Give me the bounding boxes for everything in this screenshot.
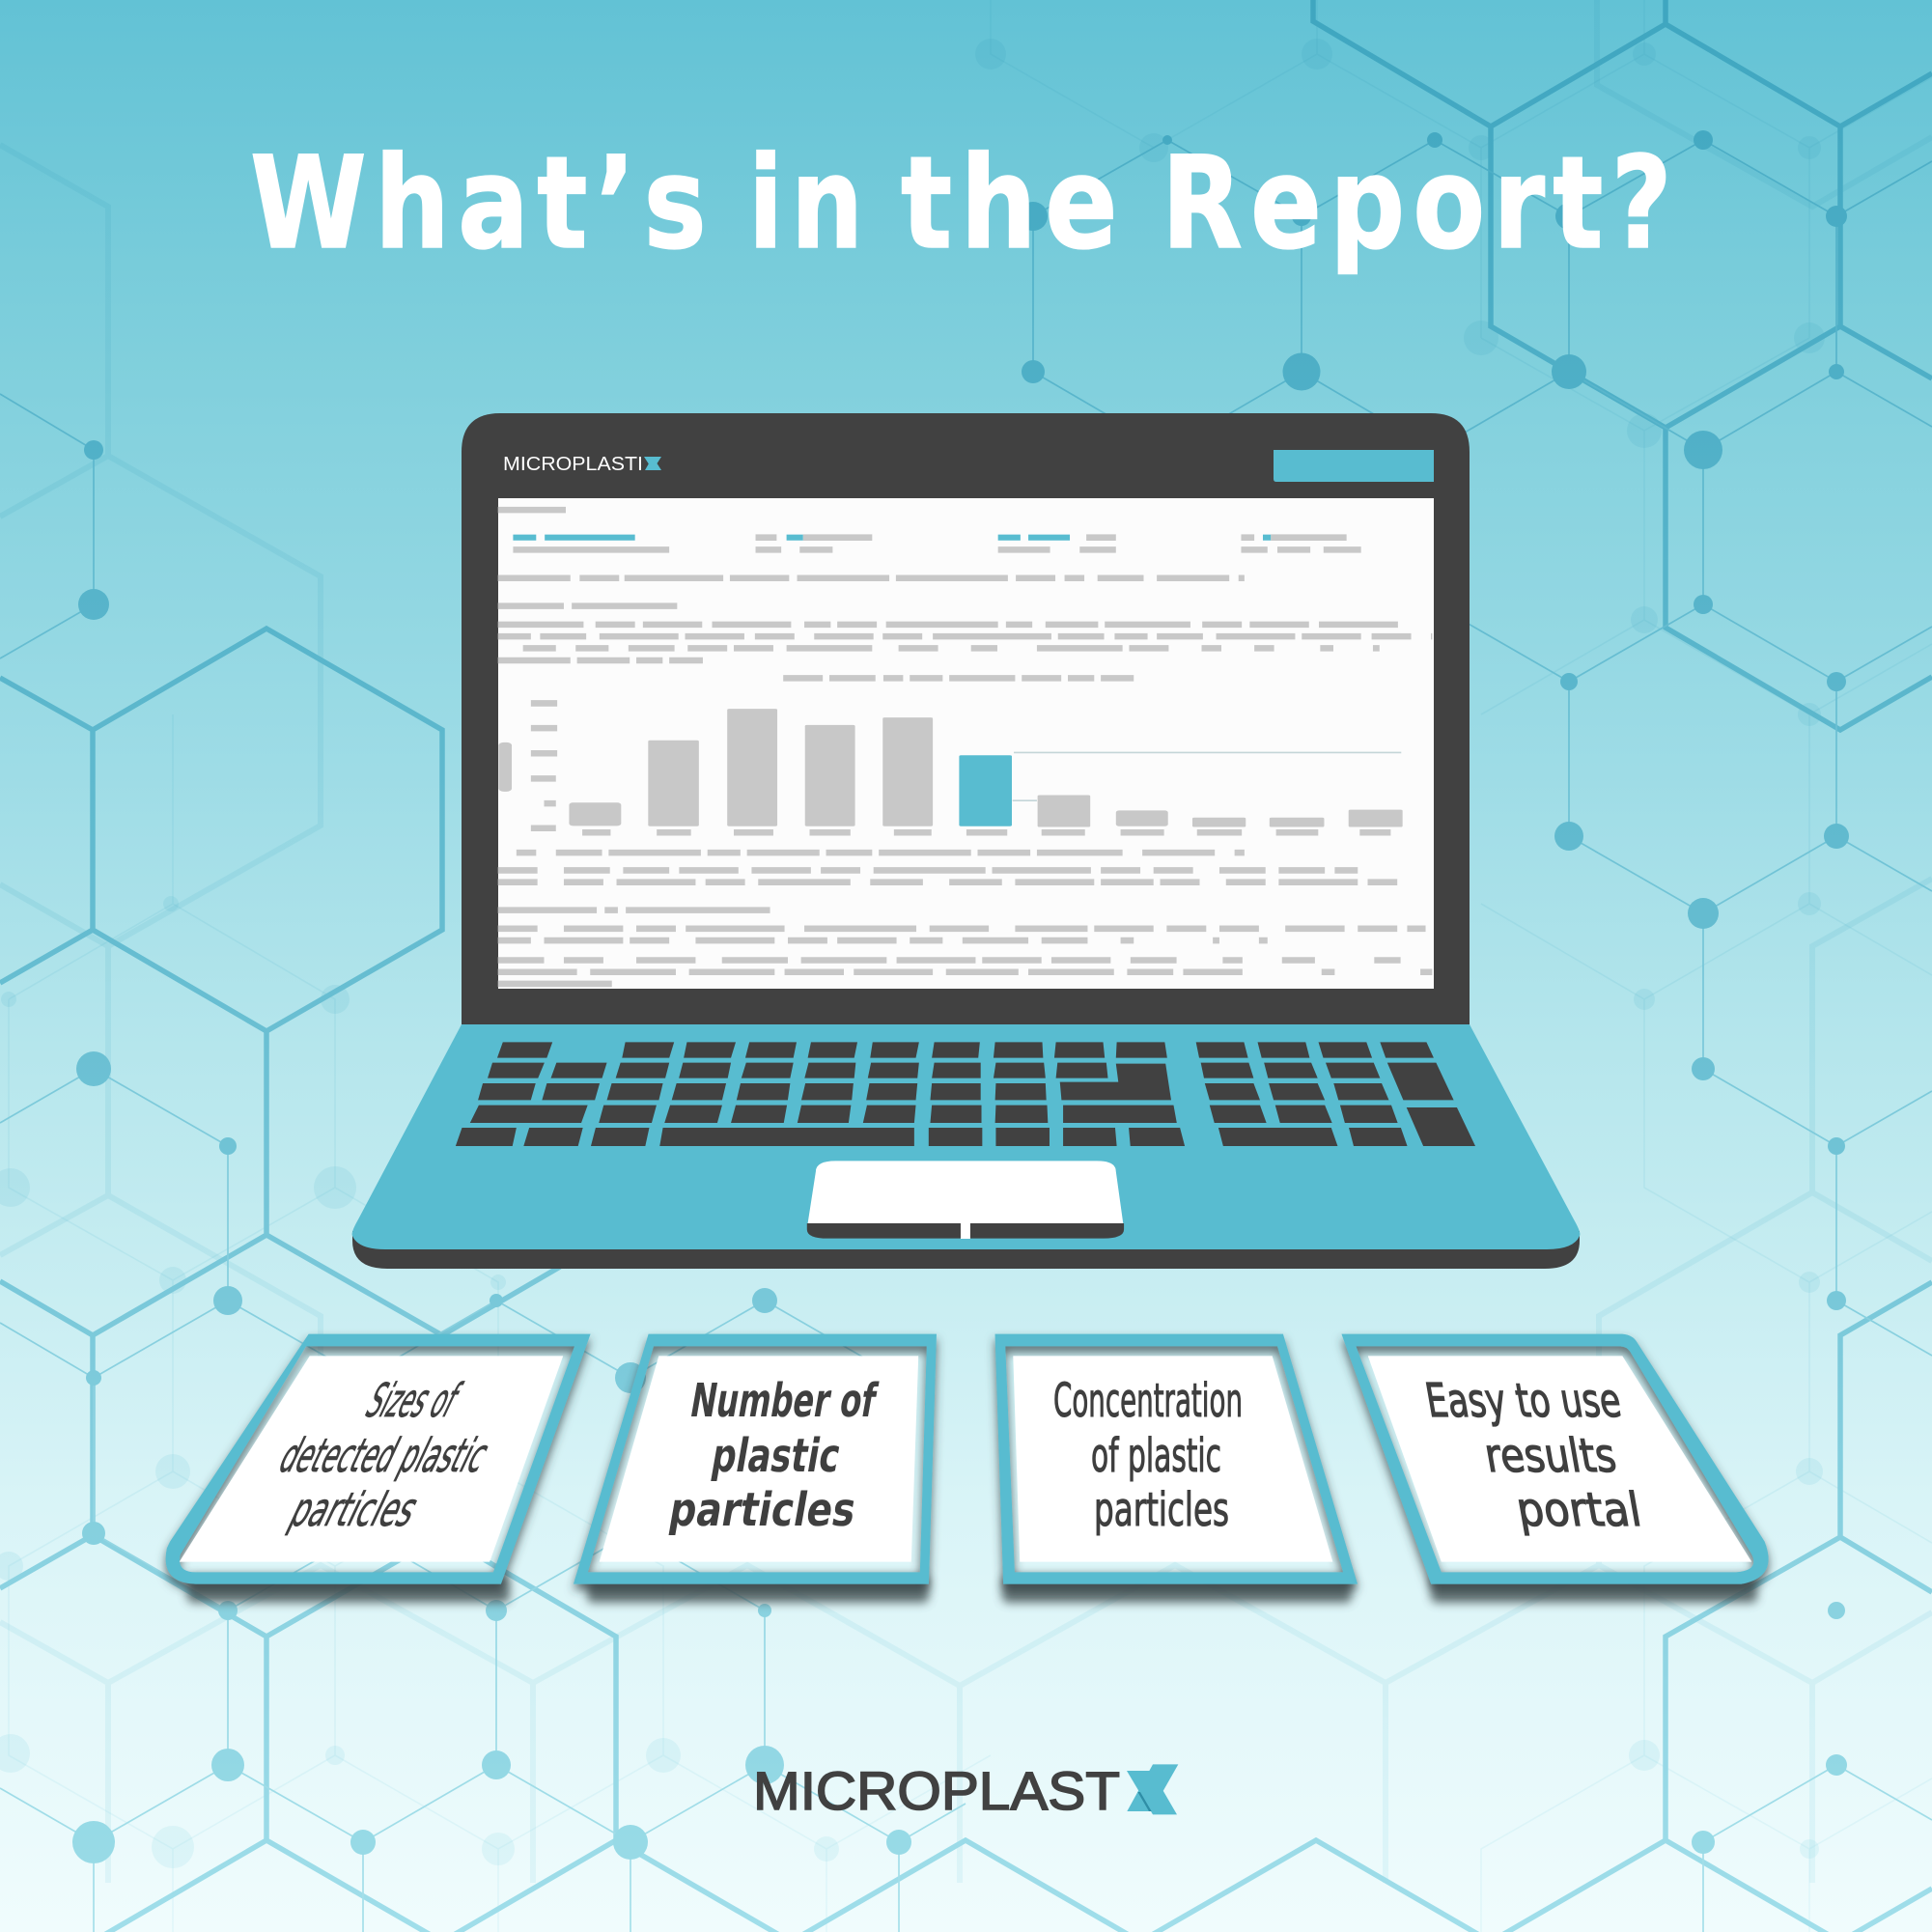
card text: detected plastic <box>271 1428 498 1482</box>
title <box>250 129 1680 278</box>
title: What’s <box>250 129 714 278</box>
card: sizes of detected plastic particles <box>166 1334 591 1603</box>
touchpad button divider <box>961 1223 970 1239</box>
card text: Easy to use <box>1421 1374 1625 1428</box>
card ground shadow <box>187 1576 510 1603</box>
card text <box>665 1374 881 1537</box>
teal header button <box>1274 450 1434 482</box>
card frame <box>166 1334 591 1584</box>
card text: Concentration <box>1053 1374 1243 1428</box>
card text: of plastic <box>1091 1429 1221 1483</box>
card text: particles <box>282 1482 428 1536</box>
card text: portal <box>1512 1483 1645 1537</box>
logo X mark <box>1127 1764 1178 1814</box>
card text <box>271 1373 498 1536</box>
card frame <box>1341 1334 1769 1584</box>
card text: particles <box>665 1483 860 1537</box>
title: Report? <box>1162 129 1680 278</box>
card frame <box>574 1334 937 1584</box>
card panel <box>1368 1356 1751 1562</box>
report text lines <box>498 510 1432 984</box>
logo: MicroplastX <box>753 1760 1178 1821</box>
keyboard keys <box>456 1042 1475 1146</box>
card frame <box>995 1334 1358 1584</box>
laptop base underside <box>352 1231 1580 1269</box>
card text: particles <box>1094 1483 1229 1537</box>
card ground shadow <box>1431 1576 1757 1603</box>
laptop <box>352 413 1580 1269</box>
logo wordmark: MICROPLAST <box>753 1760 1120 1821</box>
card text: plastic <box>708 1429 845 1483</box>
card panel <box>180 1356 563 1562</box>
keyboard and touchpad <box>456 1042 1475 1239</box>
card text: Number of <box>686 1374 881 1428</box>
card text: results <box>1480 1429 1620 1483</box>
card panel <box>600 1356 918 1562</box>
card: easy to use results portal <box>1341 1334 1769 1603</box>
chart reference line <box>1013 752 1401 800</box>
card panel <box>1013 1356 1332 1562</box>
report highlight stat text <box>513 530 1271 545</box>
card: concentration of plastic particles <box>995 1334 1358 1603</box>
laptop base deck <box>352 1024 1580 1249</box>
title: the <box>901 129 1126 278</box>
laptop header logo: MICROPLASTI <box>503 454 643 475</box>
chart axis label <box>498 742 512 792</box>
bar chart <box>569 709 1403 827</box>
touchpad <box>808 1161 1123 1223</box>
card text <box>1053 1374 1243 1537</box>
card: number of plastic particles <box>574 1334 937 1603</box>
report contents <box>498 510 1432 984</box>
card text: Sizes of <box>358 1373 468 1427</box>
card ground shadow <box>1002 1576 1352 1603</box>
laptop screen bezel <box>462 413 1470 1025</box>
card text <box>1421 1374 1645 1537</box>
title: in <box>748 129 871 278</box>
touchpad buttons <box>807 1223 1124 1239</box>
card ground shadow <box>587 1576 929 1603</box>
report screen <box>498 498 1434 989</box>
